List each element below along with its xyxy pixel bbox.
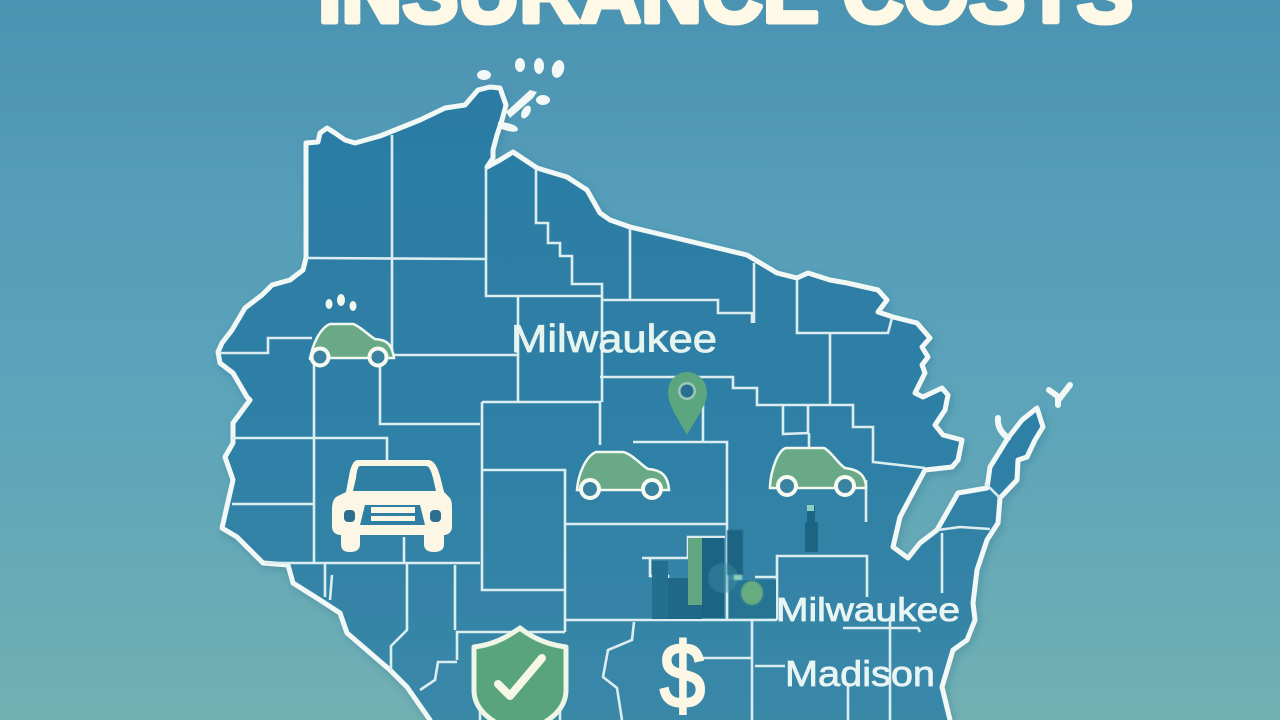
icon: dark bottle marker bbox=[805, 505, 818, 552]
icon: green car left bbox=[310, 324, 394, 366]
icon: dots above car bbox=[326, 294, 356, 311]
icon: shield with check bbox=[474, 628, 566, 720]
icon: location pin bbox=[668, 372, 707, 435]
county borders bbox=[220, 135, 1000, 720]
map of Wisconsin bbox=[218, 87, 1043, 720]
label: Milwaukee upper: Milwaukee bbox=[511, 318, 717, 361]
islands: Apostle Islands bbox=[477, 58, 566, 132]
label: Milwaukee lower: Milwaukee bbox=[776, 591, 960, 628]
chart: blurred bars bbox=[652, 530, 776, 619]
state outline bbox=[218, 87, 1043, 720]
icon: green car right bbox=[770, 448, 866, 495]
icon: cream car front bbox=[332, 460, 452, 552]
icon: green car centre bbox=[577, 452, 669, 498]
label: Madison: Madison bbox=[785, 653, 935, 694]
islands: Door County bbox=[998, 385, 1070, 438]
